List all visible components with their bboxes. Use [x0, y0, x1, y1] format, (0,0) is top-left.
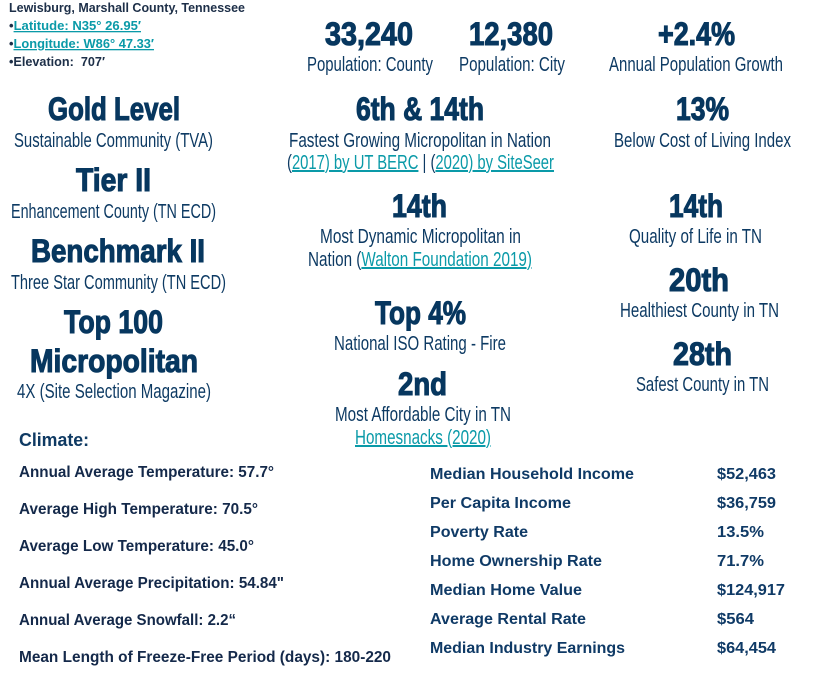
stat: gold level: [14, 91, 213, 152]
panel: income and housing table: Poverty Rate: [430, 524, 528, 541]
panel: income and housing table: $64,454: [717, 640, 776, 657]
stat: quality of life: [629, 188, 762, 248]
stat: most dynamic: 14th: [392, 188, 447, 224]
panel: income and housing table: Per Capita Income: [430, 495, 571, 512]
stat: safest county: Safest County in TN: [636, 374, 769, 396]
panel: income and housing table: $52,463: [717, 466, 776, 483]
panel: income and housing table: $36,759: [717, 495, 776, 512]
stat: fastest growing: (2017) by UT BERC | (2020) by SiteSeer: [287, 152, 554, 174]
panel: location details: •Longitude: W86° 47.33′: [9, 36, 154, 51]
stat: city population: Population: City: [459, 54, 565, 76]
stat: safest county: [636, 336, 769, 396]
panel: income and housing table: [430, 466, 785, 657]
stat: quality of life: 14th: [669, 188, 723, 224]
panel: income and housing table: $124,917: [717, 582, 785, 599]
stat: most affordable: [335, 366, 511, 449]
panel: income and housing table: Median Household Income: [430, 466, 634, 483]
stat: benchmark II: Benchmark II: [31, 233, 205, 269]
panel: income and housing table: 71.7%: [717, 553, 764, 570]
stat: top 100 micropolitan: 4X (Site Selection Magazine): [17, 381, 211, 403]
stat: gold level: Sustainable Community (TVA): [14, 130, 213, 152]
stat: county population: 33,240: [325, 16, 413, 52]
stat: quality of life: Quality of Life in TN: [629, 226, 762, 248]
stat: most affordable: Homesnacks (2020): [355, 427, 491, 449]
panel: climate: Average Low Temperature: 45.0°: [19, 538, 254, 555]
panel: income and housing table: Median Industry Earnings: [430, 640, 625, 657]
stat: most affordable: Most Affordable City in TN: [335, 404, 511, 426]
panel: climate: Mean Length of Freeze-Free Period (days): 180-220: [19, 649, 391, 666]
stat: ISO rating: National ISO Rating - Fire: [334, 333, 506, 355]
panel: climate: Annual Average Snowfall: 2.2“: [19, 612, 236, 629]
stat: population growth: [609, 16, 783, 76]
stat: healthiest county: 20th: [669, 262, 729, 298]
stat: cost of living: 13%: [676, 91, 729, 127]
stat: top 100 micropolitan: Micropolitan: [30, 343, 198, 379]
stat: top 100 micropolitan: [17, 304, 211, 403]
stat: most affordable: 2nd: [398, 366, 447, 402]
panel: climate: Annual Average Temperature: 57.7°: [19, 464, 274, 481]
panel: income and housing table: Home Ownership Rate: [430, 553, 602, 570]
panel: location details: Lewisburg, Marshall County, Tennessee: [9, 0, 245, 15]
stat: fastest growing: [287, 91, 554, 174]
stat: city population: 12,380: [469, 16, 553, 52]
stat: most dynamic: Most Dynamic Micropolitan in: [320, 226, 521, 248]
stat: gold level: Gold Level: [48, 91, 180, 127]
panel: income and housing table: $564: [717, 611, 754, 628]
stat: benchmark II: [11, 233, 226, 294]
stat: most dynamic: Nation (Walton Foundation 2019): [308, 249, 532, 271]
stat: tier II: [11, 162, 216, 223]
panel: climate: Average High Temperature: 70.5°: [19, 501, 258, 518]
stat: healthiest county: [620, 262, 779, 322]
panel: location details: •Elevation: 707′: [9, 54, 105, 69]
stat: top 100 micropolitan: Top 100: [64, 304, 163, 340]
stat: cost of living: [614, 91, 791, 152]
stat: population growth: +2.4%: [658, 16, 735, 52]
panel: location details: •Latitude: N35° 26.95′: [9, 18, 141, 33]
panel: income and housing table: Median Home Value: [430, 582, 582, 599]
stat: county population: [307, 16, 433, 76]
panel: income and housing table: 13.5%: [717, 524, 764, 541]
heading: climate: Climate:: [19, 430, 89, 450]
stat: fastest growing: Fastest Growing Micropolitan in Nation: [289, 130, 551, 152]
panel: climate: [19, 430, 391, 666]
stat: ISO rating: [334, 295, 506, 355]
stat: safest county: 28th: [673, 336, 732, 372]
panel: climate: Annual Average Precipitation: 54.84": [19, 575, 284, 592]
stat: ISO rating: Top 4%: [375, 295, 466, 331]
stat: tier II: Tier II: [76, 162, 151, 198]
stat: fastest growing: 6th & 14th: [356, 91, 484, 127]
panel: location details: [9, 0, 245, 69]
stat: benchmark II: Three Star Community (TN ECD): [11, 272, 226, 294]
stat: city population: [459, 16, 565, 76]
stat: county population: Population: County: [307, 54, 433, 76]
panel: income and housing table: Average Rental Rate: [430, 611, 586, 628]
stat: tier II: Enhancement County (TN ECD): [11, 201, 216, 223]
stat: most dynamic: [308, 188, 532, 271]
